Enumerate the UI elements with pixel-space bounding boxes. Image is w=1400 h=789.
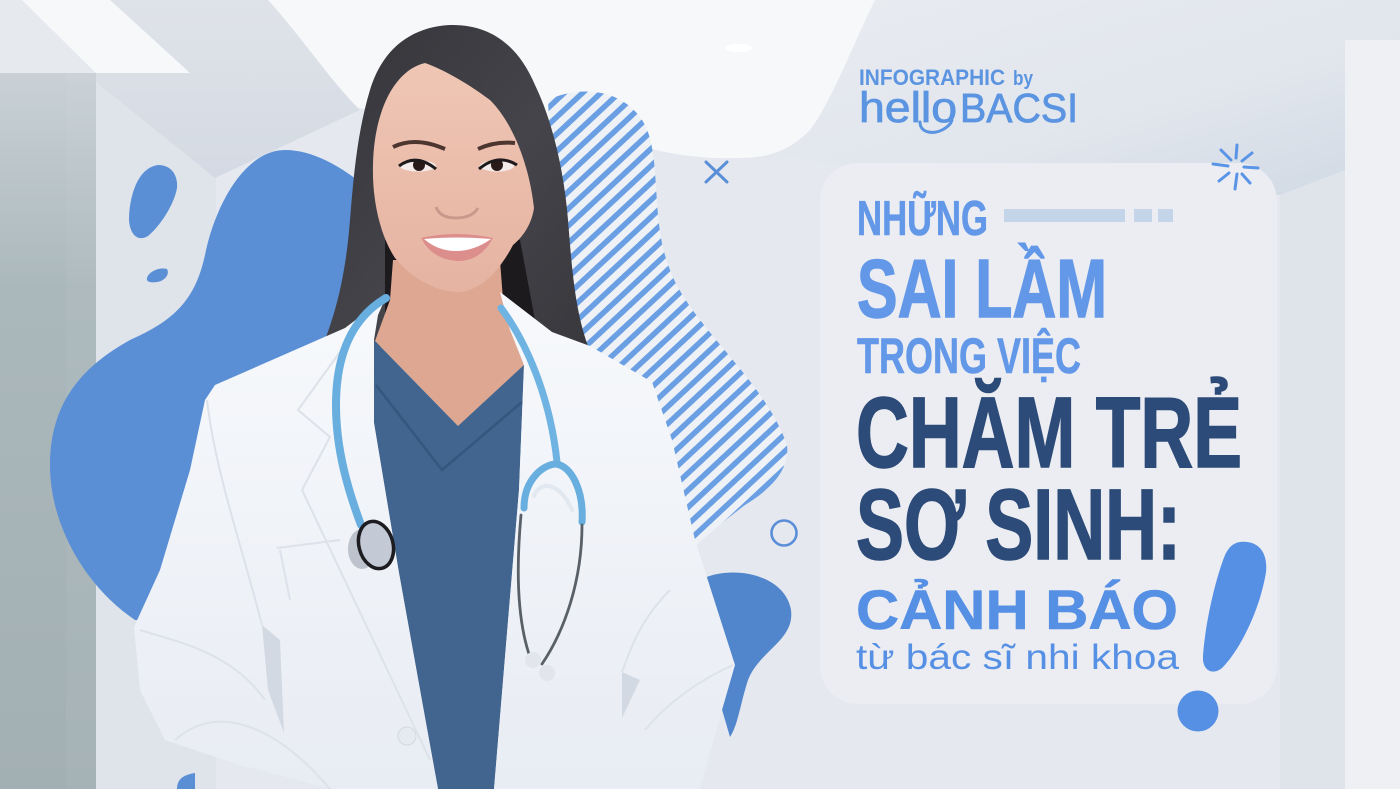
coat folds [140, 345, 733, 789]
stethoscope ear tips [525, 652, 555, 681]
face [373, 63, 534, 292]
icon: large exclamation [1178, 542, 1266, 732]
heading text: TRONG VIỆC [857, 328, 1081, 384]
large blue blob behind doctor [50, 150, 370, 620]
hair back [326, 25, 588, 350]
coat button [398, 727, 416, 745]
striped blob [548, 92, 787, 546]
coat right [494, 292, 735, 789]
logo: BACSI [960, 85, 1078, 131]
stethoscope chest piece [348, 517, 399, 573]
eyes [399, 159, 517, 172]
sleeve gaps [262, 625, 640, 733]
scrub neckline seam [376, 385, 522, 470]
icon: exclamation left [129, 165, 177, 282]
heading text: SAI LẦM [857, 242, 1107, 335]
heading text: từ bác sĩ nhi khoa [856, 638, 1180, 677]
logo: hello [859, 84, 957, 132]
dark shadow under chin [385, 240, 535, 320]
icon: cross [706, 162, 727, 182]
stethoscope tube [336, 298, 582, 664]
heading text: CẢNH BÁO [856, 578, 1178, 641]
heading text: CHĂM TRẺ [856, 377, 1242, 489]
small blue arc near bottom [177, 773, 195, 789]
logo: INFOGRAPHIC [859, 65, 1005, 90]
heading text: SƠ SINH: [856, 469, 1181, 581]
logo [859, 65, 1078, 132]
heading text [856, 192, 1242, 677]
scrubs [374, 340, 524, 789]
divider bars [1004, 209, 1173, 222]
coat left [134, 297, 438, 789]
nose [436, 207, 478, 218]
small lower blue blob [690, 573, 791, 737]
logo: by [1013, 68, 1034, 90]
icon: sparkle burst [1213, 145, 1258, 189]
title panel [820, 163, 1277, 704]
icon: small circle [772, 520, 796, 546]
doctor [134, 25, 735, 789]
eyebrows [393, 142, 515, 149]
heading text: NHỮNG [857, 192, 988, 246]
mouth [421, 234, 493, 261]
neck and chest [375, 260, 526, 426]
